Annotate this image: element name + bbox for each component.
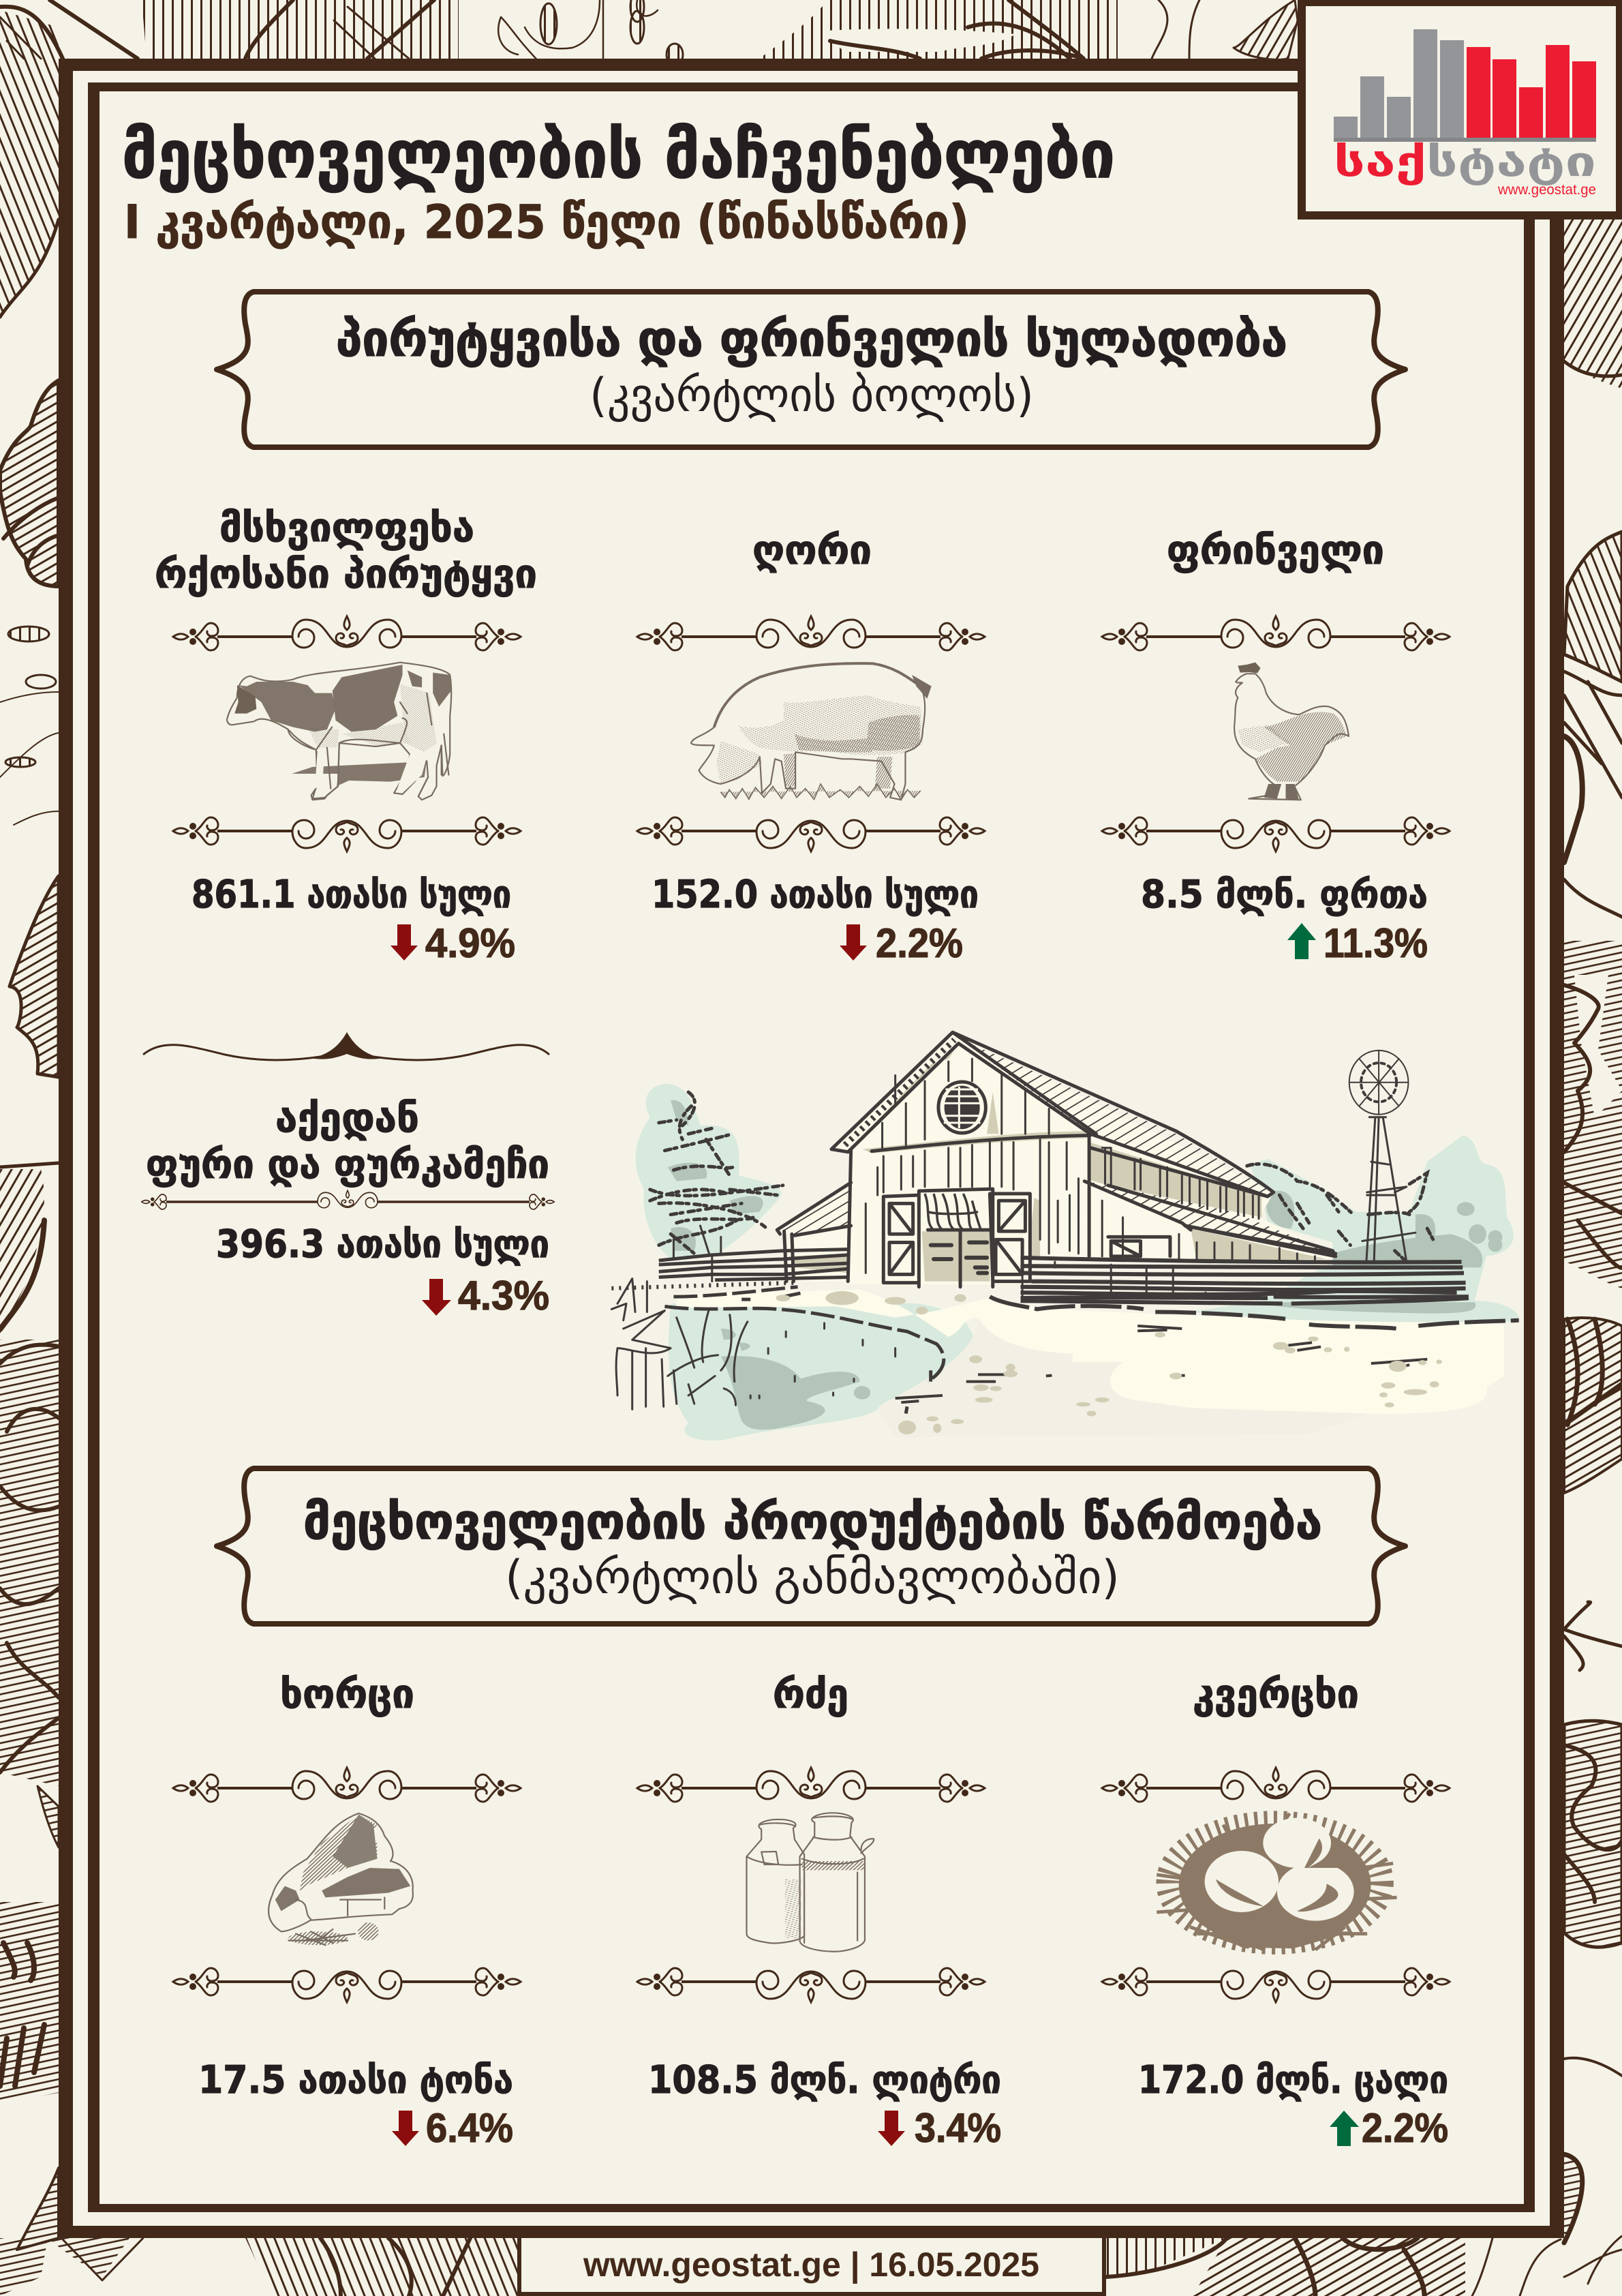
logo box: Geostat xyxy=(1298,0,1622,220)
side block: of which cows and buffaloes: აქედან xyxy=(275,1095,419,1141)
ornament row bottom xyxy=(173,1968,1450,2002)
banner: livestock heading xyxy=(217,292,1405,447)
leaves: bottom strip xyxy=(0,2238,1561,2296)
barn line work xyxy=(611,1032,1519,1434)
banner: livestock heading: (კვარტლის ბოლოს) xyxy=(590,369,1034,423)
value: pigs xyxy=(652,873,979,966)
cream ground xyxy=(677,1290,1504,1414)
washes xyxy=(635,1084,1519,1440)
barn body xyxy=(777,1032,1336,1284)
heading: meat: ხორცი xyxy=(280,1671,414,1717)
side block: of which cows and buffaloes: 396.3 ათასი სული xyxy=(216,1222,549,1267)
right fence xyxy=(1021,1258,1469,1303)
subtitle: I კვარტალი, 2025 წელი (წინასწარი) xyxy=(124,196,969,250)
heading: milk: რძე xyxy=(773,1671,848,1717)
leaves: left strip xyxy=(0,10,59,2250)
value: meat: 6.4% xyxy=(426,2105,513,2151)
swash xyxy=(143,1032,549,1060)
ground lines xyxy=(611,1283,1519,1414)
icon: rooster xyxy=(1234,663,1349,800)
logo box: Geostat: სტატი xyxy=(1426,138,1596,186)
reeds xyxy=(611,1279,748,1409)
side block: of which cows and buffaloes xyxy=(142,1032,554,1318)
arrow down xyxy=(391,924,418,961)
value: meat: 17.5 ათასი ტონა xyxy=(198,2058,513,2102)
ornament row top xyxy=(173,616,1450,650)
value: poultry xyxy=(1141,873,1428,966)
icon: cow xyxy=(227,663,451,800)
arrow up xyxy=(1287,923,1316,959)
title: მეცხოველეობის მაჩვენებლები xyxy=(122,117,1115,193)
value: cattle: 4.9% xyxy=(425,920,515,966)
banner: production heading xyxy=(217,1468,1405,1624)
ornament row top xyxy=(173,1768,1450,1802)
leaves: top strip xyxy=(0,0,1298,68)
value: cattle: 861.1 ათასი სული xyxy=(192,873,511,917)
value: eggs xyxy=(1138,2058,1448,2151)
value: pigs: 2.2% xyxy=(876,920,963,966)
value: pigs: 152.0 ათასი სული xyxy=(652,873,979,917)
heading: cattle xyxy=(155,504,537,597)
logo box: Geostat: საქ xyxy=(1334,138,1426,186)
value: milk: 3.4% xyxy=(915,2105,1001,2151)
arrow down xyxy=(392,2111,419,2146)
banner: production heading: (კვარტლის განმავლობაში) xyxy=(505,1551,1120,1605)
heading: pigs: ღორი xyxy=(752,527,872,573)
value: poultry: 8.5 მლნ. ფრთა xyxy=(1141,873,1428,917)
ornament row bottom xyxy=(173,817,1450,851)
value: meat xyxy=(198,2058,513,2151)
ornament xyxy=(142,1190,554,1209)
value: milk: 108.5 მლნ. ლიტრი xyxy=(648,2058,1001,2102)
arrow down xyxy=(878,2111,905,2146)
footer box: www.geostat.ge | 16.05.2025 xyxy=(583,2246,1039,2284)
tree and bush leaves xyxy=(650,1092,1433,1262)
illustration: barn with windmill xyxy=(611,1032,1519,1440)
value: cattle xyxy=(192,873,515,966)
icon: milk cans xyxy=(747,1813,874,1952)
arrow down xyxy=(840,924,867,961)
value: poultry: 11.3% xyxy=(1323,920,1428,966)
stones xyxy=(776,1291,1442,1434)
value: milk xyxy=(648,2058,1001,2151)
arrow up xyxy=(1330,2111,1359,2146)
icon: meat xyxy=(269,1813,413,1945)
heading: eggs: კვერცხი xyxy=(1193,1671,1359,1717)
heading: cattle: მსხვილფეხა xyxy=(219,504,474,551)
icon: nest with eggs xyxy=(1157,1813,1397,1950)
side block: of which cows and buffaloes: ფური და ფურკამეჩი xyxy=(146,1141,549,1188)
leaves: right strip xyxy=(1564,220,1622,2284)
side block: of which cows and buffaloes: 4.3% xyxy=(458,1273,549,1318)
banner: livestock heading: პირუტყვისა და ფრინველის სულადობა xyxy=(336,310,1287,367)
value: eggs: 2.2% xyxy=(1362,2105,1448,2151)
logo box: Geostat: www.geostat.ge xyxy=(1497,182,1596,198)
footer box xyxy=(519,2238,1104,2294)
banner: production heading: მეცხოველეობის პროდუქტების წარმოება xyxy=(303,1493,1322,1550)
windmill xyxy=(1349,1051,1416,1262)
icon: pig xyxy=(691,663,932,800)
heading: cattle: რქოსანი პირუტყვი xyxy=(155,551,537,597)
arrow down xyxy=(422,1279,451,1316)
heading: poultry: ფრინველი xyxy=(1167,527,1384,573)
value: eggs: 172.0 მლნ. ცალი xyxy=(1138,2058,1448,2102)
